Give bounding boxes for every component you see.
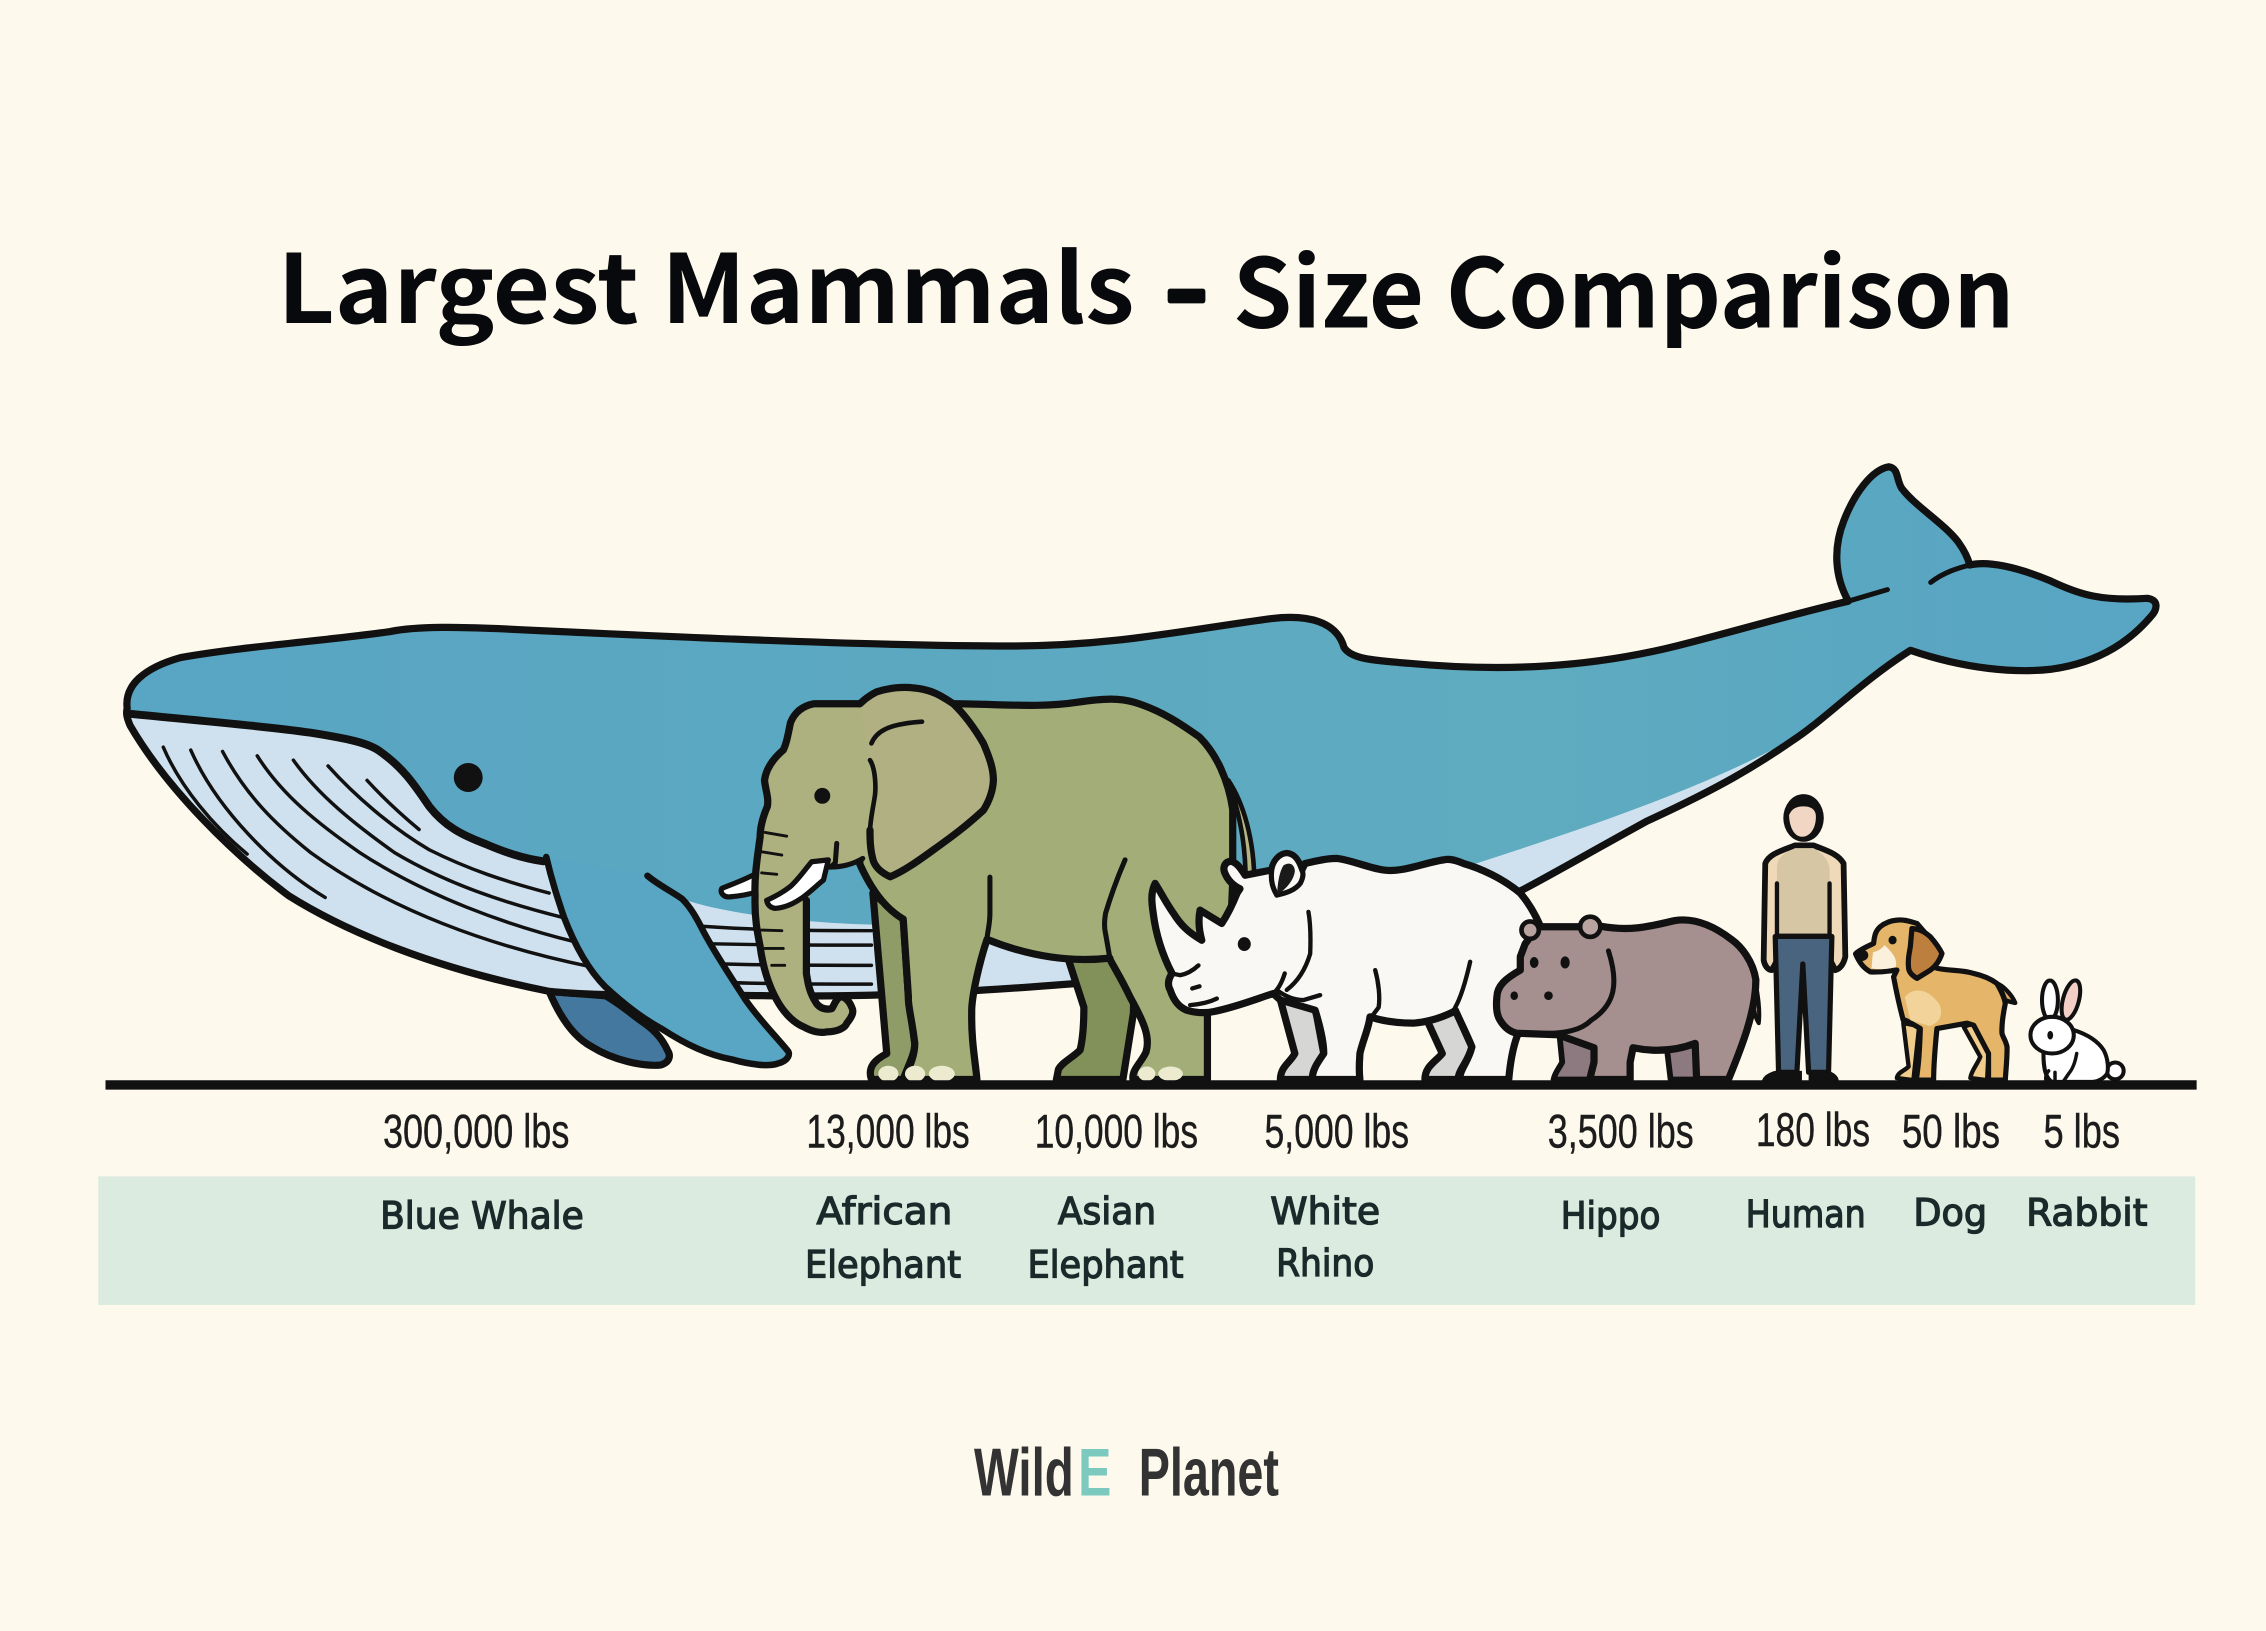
elephant body: [860, 699, 1233, 1080]
title: [277, 213, 2015, 355]
whale eye: [454, 763, 483, 792]
title: Size Comparison: [1233, 217, 2015, 355]
elephant toes: [878, 1066, 1183, 1082]
logo: E: [1078, 1436, 1111, 1511]
weight labels: 10,000 lbs: [1035, 1105, 1198, 1158]
weight labels: 300,000 lbs: [383, 1105, 569, 1158]
animal name labels: Hippo: [1561, 1193, 1660, 1237]
whale rear flipper: [549, 991, 669, 1065]
whale mouth line: [132, 714, 543, 861]
animal name labels: White: [1270, 1189, 1380, 1233]
rhino inner ear: [1277, 864, 1295, 895]
weight labels: [383, 1104, 2120, 1158]
dog tail: [1997, 983, 2015, 1003]
rabbit eye: [2047, 1031, 2053, 1039]
rhino eye: [1238, 937, 1251, 951]
rabbit ears: [2042, 978, 2084, 1022]
elephant tail: [1228, 780, 1254, 884]
animal name labels: Blue Whale: [380, 1193, 584, 1237]
weight labels: 5 lbs: [2043, 1105, 2120, 1158]
whale belly: [130, 714, 1775, 996]
animal name labels: Rhino: [1276, 1241, 1374, 1285]
elephant eye: [814, 788, 830, 804]
elephant: [721, 687, 1254, 1082]
elephant leg fold lines: [987, 860, 1125, 958]
hippo eyes and nostrils: [1510, 956, 1570, 1000]
elephant far tusk: [721, 873, 757, 897]
dog nose: [1854, 949, 1868, 961]
elephant trunk wrinkles: [762, 832, 787, 965]
title: Largest Mammals: [277, 213, 1134, 351]
elephant far front leg: [870, 893, 915, 1080]
rabbit feet: [2046, 1054, 2077, 1082]
elephant far rear leg: [1056, 947, 1134, 1080]
label band: [98, 1176, 2195, 1305]
dog ear: [1908, 929, 1942, 978]
whale front flipper: [546, 857, 789, 1065]
elephant ear outline: [860, 687, 993, 877]
weight labels: 13,000 lbs: [806, 1105, 970, 1158]
hippo: [1496, 917, 1759, 1080]
hippo body: [1496, 920, 1756, 1080]
logo: Wild: [974, 1436, 1074, 1511]
elephant jaw: [830, 843, 863, 867]
dog eye: [1889, 936, 1897, 944]
hippo tail: [1752, 968, 1759, 1023]
logo: Planet: [1139, 1436, 1279, 1511]
dog muzzle and chest: [1871, 945, 1896, 969]
rabbit head: [2030, 1017, 2074, 1054]
title: –: [1166, 214, 1207, 352]
elephant ear folds: [870, 722, 922, 832]
hippo face lines: [1532, 951, 1614, 1034]
animal name labels: Asian: [1058, 1189, 1156, 1233]
dog body: [1856, 920, 2007, 1080]
rabbit body: [2043, 1030, 2108, 1082]
whale flipper outline: [546, 857, 789, 1065]
human shoes: [1762, 1071, 1839, 1084]
human pants: [1775, 936, 1832, 1072]
dog far legs: [1897, 1023, 1989, 1080]
dog: [1854, 920, 2015, 1080]
elephant ear fill: [860, 687, 993, 877]
whale outline: [127, 467, 2156, 996]
rabbit: [2030, 978, 2124, 1082]
animal name labels: [380, 1189, 2147, 1287]
logo: [974, 1436, 1279, 1511]
animal name labels: Dog: [1913, 1190, 1987, 1234]
whale tail creases: [1848, 565, 1970, 601]
human head: [1783, 794, 1824, 842]
elephant near tusk: [767, 860, 828, 908]
animal name labels: African: [817, 1189, 952, 1233]
rabbit tail: [2107, 1062, 2124, 1079]
elephant head fill: [755, 704, 925, 1032]
blue whale: [127, 467, 2156, 1065]
rhino body: [1152, 854, 1541, 1080]
human face: [1789, 806, 1816, 837]
rhino nostril: [1192, 986, 1199, 988]
human arm lines: [1777, 883, 1830, 936]
elephant head outline: [755, 704, 860, 1032]
human torso: [1777, 848, 1830, 934]
white rhino: [1152, 854, 1541, 1080]
rhino far legs: [1280, 1000, 1472, 1080]
human arms and shirt: [1764, 845, 1845, 970]
animal name labels: Elephant: [805, 1243, 961, 1287]
animal name labels: Human: [1746, 1192, 1866, 1236]
human: [1762, 794, 1845, 1084]
whale body: [127, 467, 2156, 996]
animal name labels: Rabbit: [2026, 1190, 2147, 1234]
animal name labels: Elephant: [1028, 1243, 1184, 1287]
ground line: [105, 1080, 2197, 1090]
hippo ears: [1521, 917, 1600, 939]
weight labels: 180 lbs: [1756, 1104, 1870, 1157]
hippo far legs: [1554, 1033, 1698, 1080]
whale belly grooves: [163, 747, 871, 984]
weight labels: 50 lbs: [1902, 1105, 2000, 1158]
weight labels: 5,000 lbs: [1265, 1105, 1409, 1158]
rhino fold lines: [1172, 912, 1470, 1019]
rhino ear: [1271, 854, 1303, 895]
weight labels: 3,500 lbs: [1548, 1105, 1694, 1158]
